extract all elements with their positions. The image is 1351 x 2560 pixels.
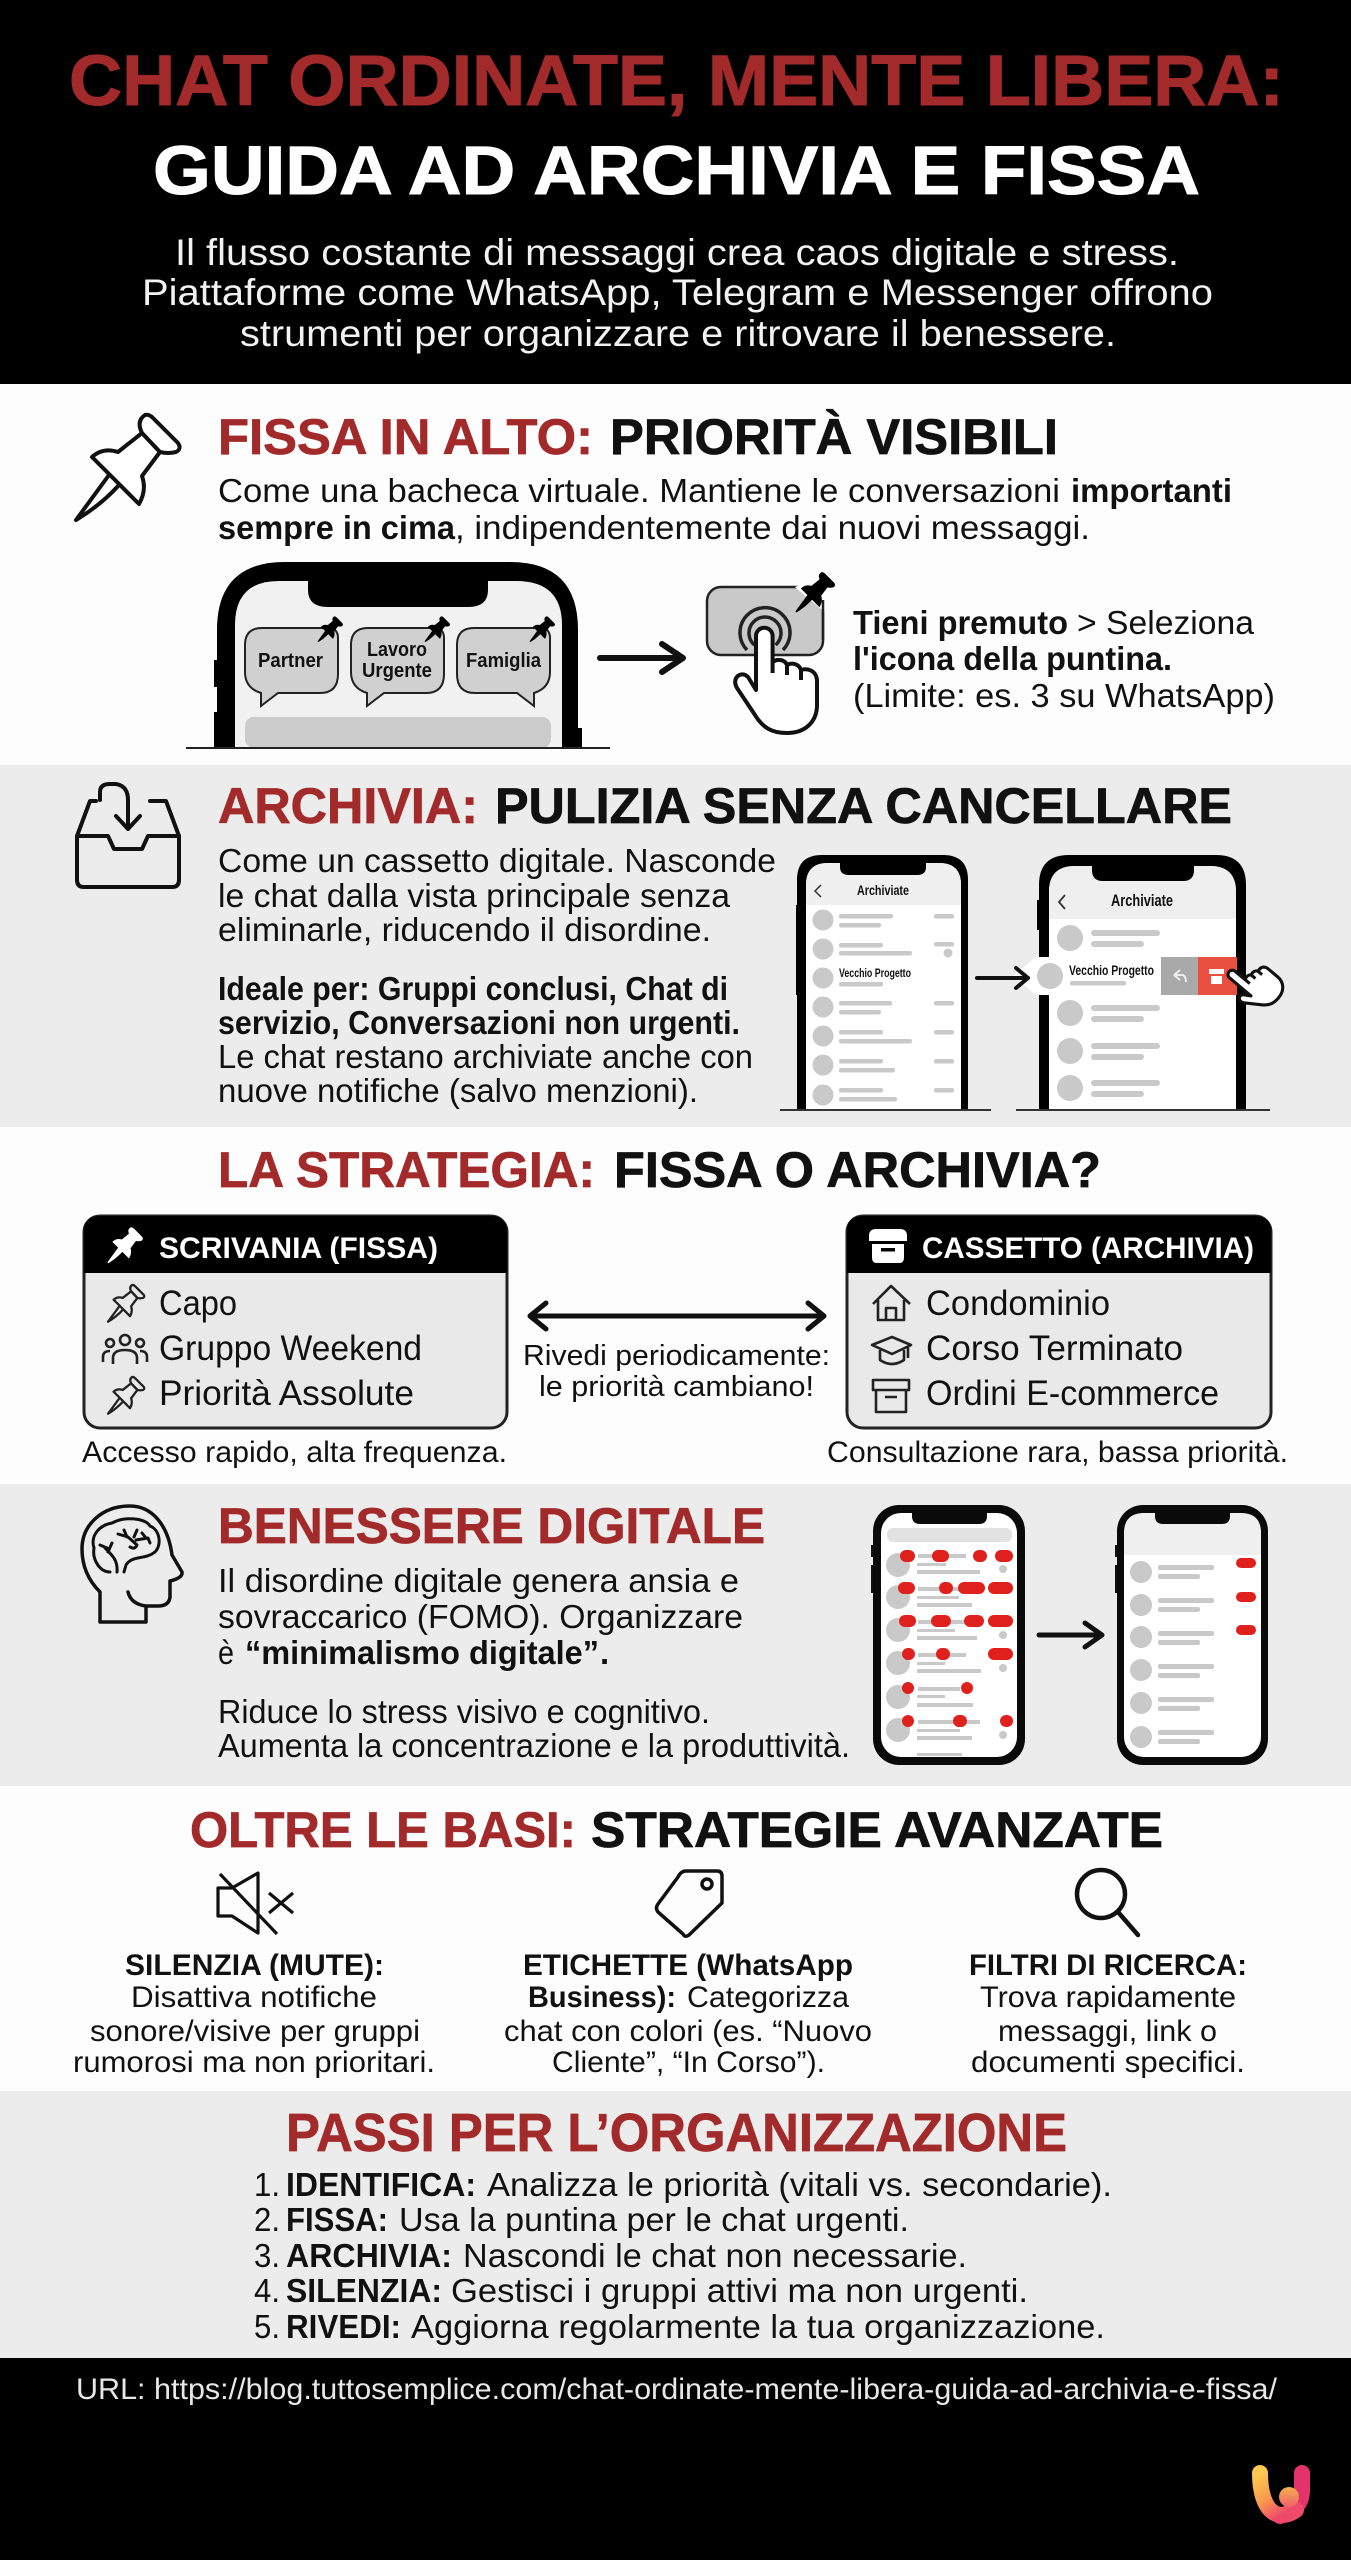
chat bubble: partner: Partner	[258, 650, 323, 672]
text: description: Il disordine digitale genera ansia e	[218, 1562, 739, 1599]
heading: benessere digitale: BENESSERE DIGITALE	[218, 1498, 765, 1554]
text: instructions: > Seleziona	[1077, 604, 1255, 641]
step 4: Gestisci i gruppi attivi ma non urgenti.	[451, 2272, 1028, 2309]
step 1	[254, 2166, 1112, 2203]
step 3: ARCHIVIA:	[286, 2237, 452, 2274]
intro text	[142, 232, 1213, 354]
step 1: 1.	[254, 2166, 280, 2203]
step 3: 3.	[254, 2237, 280, 2274]
phone: archived list	[780, 855, 991, 1111]
logo	[1260, 2473, 1302, 2516]
heading: fissa in alto: PRIORITÀ VISIBILI	[610, 409, 1058, 465]
arrow	[977, 968, 1028, 988]
text: etichette: Categorizza	[687, 1981, 849, 2014]
text: etichette: ETICHETTE (WhatsApp	[523, 1949, 853, 1982]
text: silenzia: rumorosi ma non prioritari.	[73, 2046, 435, 2079]
text: description: .	[600, 1634, 609, 1671]
text: ideal uses: servizio, Conversazioni non urgenti.	[218, 1004, 740, 1041]
panel: footer	[0, 2358, 1351, 2560]
chat bubble: famiglia: Famiglia	[466, 650, 542, 672]
swiped chat row: Vecchio Progetto	[1069, 963, 1154, 978]
text: etichette	[504, 1949, 872, 2079]
text: benefits: Riduce lo stress visivo e cognitivo.	[218, 1693, 710, 1730]
text: benefits: Aumenta la concentrazione e la produttività.	[218, 1727, 850, 1764]
text: instructions: (Limite: es. 3 su WhatsApp)	[853, 677, 1275, 714]
step 4: SILENZIA:	[286, 2272, 442, 2309]
chat bubble: partner	[245, 617, 342, 706]
arrow	[1039, 1623, 1102, 1647]
intro text: Il flusso costante di messaggi crea caos digitale e stress.	[175, 232, 1179, 273]
title line 1: CHAT ORDINATE, MENTE LIBERA:	[69, 42, 1284, 121]
text: description: sempre in cima	[218, 509, 456, 546]
step 5: Aggiorna regolarmente la tua organizzazione.	[411, 2308, 1105, 2345]
heading: la strategia	[218, 1142, 1101, 1198]
panel: passi per l'organizzazione	[0, 2091, 1351, 2358]
text: filtri di ricerca: Trova rapidamente	[980, 1981, 1236, 2014]
heading: archivia: PULIZIA SENZA CANCELLARE	[495, 778, 1232, 834]
heading: strategie avanzate	[190, 1802, 1163, 1858]
item: condominio: Condominio	[926, 1284, 1110, 1323]
text: ideal uses: Ideale per: Gruppi conclusi, Chat di	[218, 970, 728, 1007]
step 5: RIVEDI:	[286, 2308, 401, 2345]
card: scrivania: SCRIVANIA (FISSA)	[159, 1232, 438, 1265]
card: cassetto	[847, 1216, 1271, 1428]
step 4: 4.	[254, 2272, 280, 2309]
phone: swipe to archive	[1013, 855, 1289, 1111]
text: description: “minimalismo digitale”	[245, 1634, 599, 1671]
icon: hand tapping	[1219, 951, 1289, 1019]
text: etichette: Cliente”, “In Corso”).	[552, 2046, 825, 2079]
text: etichette: Business):	[528, 1981, 676, 2014]
text: description	[218, 472, 1232, 546]
step 2: Usa la puntina per le chat urgenti.	[399, 2201, 909, 2238]
step 2: FISSA:	[286, 2201, 388, 2238]
panel: archivia	[0, 765, 1351, 1127]
text: description: , indipendentemente dai nuovi messaggi.	[455, 509, 1090, 546]
text: description: importanti	[1071, 472, 1232, 509]
phone: archived list: Archiviate	[857, 882, 909, 898]
text: review note: Rivedi periodicamente:	[523, 1340, 830, 1372]
icon: push pin	[76, 415, 180, 520]
text: filtri di ricerca: messaggi, link o	[998, 2015, 1217, 2048]
caption: cassetto: Consultazione rara, bassa priorità.	[827, 1436, 1288, 1469]
step 2: 2.	[254, 2201, 280, 2238]
chat bubble: lavoro urgente: Urgente	[362, 660, 432, 682]
chat bubble: famiglia	[457, 617, 554, 706]
heading: fissa in alto: FISSA IN ALTO:	[218, 409, 593, 465]
double arrow	[530, 1303, 824, 1329]
icon: magnifier	[1077, 1870, 1138, 1935]
text: description	[218, 842, 776, 948]
step 3: Nascondi le chat non necessarie.	[463, 2237, 967, 2274]
step 5: 5.	[254, 2308, 280, 2345]
text: review note	[523, 1340, 830, 1403]
text: silenzia	[73, 1949, 435, 2079]
text: description: Come un cassetto digitale. Nasconde	[218, 842, 776, 879]
chat bubble: lavoro urgente	[351, 617, 449, 706]
heading: archivia: ARCHIVIA:	[218, 778, 478, 834]
text: silenzia: sonore/visive per gruppi	[90, 2015, 420, 2048]
text: ideal uses	[218, 970, 753, 1109]
phone: organized chats	[1115, 1505, 1268, 1765]
step 3	[254, 2237, 967, 2274]
icon: white archive box	[869, 1229, 907, 1263]
card: cassetto: CASSETTO (ARCHIVIA)	[922, 1232, 1254, 1265]
icon: tag	[656, 1871, 722, 1936]
panel: benessere digitale	[0, 1484, 1351, 1786]
intro text: strumenti per organizzare e ritrovare il benessere.	[240, 313, 1116, 354]
heading: passi: PASSI PER L’ORGANIZZAZIONE	[286, 2103, 1067, 2163]
url: URL: https://blog.tuttosemplice.com/chat-ordinate-mente-libera-guida-ad-archivia-e-fissa/	[76, 2373, 1278, 2406]
panel: header	[0, 0, 1351, 384]
text: description: è	[218, 1634, 234, 1671]
text: instructions: l'icona della puntina.	[853, 640, 1172, 677]
phone: archived list: Vecchio Progetto	[839, 966, 911, 980]
item: priorita assolute: Priorità Assolute	[159, 1374, 414, 1413]
icon: long press with pin	[707, 570, 840, 733]
text: filtri di ricerca	[969, 1949, 1247, 2079]
icon: inbox tray	[77, 784, 179, 887]
icon: muted speaker	[218, 1873, 293, 1934]
phone: cluttered notifications	[871, 1505, 1025, 1765]
text: filtri di ricerca: FILTRI DI RICERCA:	[969, 1949, 1247, 1982]
text: description: Come una bacheca virtuale. Mantiene le conversazioni	[218, 472, 1060, 509]
heading: la strategia: FISSA O ARCHIVIA?	[614, 1142, 1101, 1198]
item: capo	[108, 1284, 237, 1323]
text: description: le chat dalla vista principale senza	[218, 877, 731, 914]
card: scrivania	[84, 1216, 507, 1428]
phone: swipe to archive: Archiviate	[1111, 892, 1173, 910]
text: description	[218, 1562, 743, 1671]
swiped chat row	[1013, 957, 1237, 995]
heading: strategie avanzate: STRATEGIE AVANZATE	[591, 1802, 1163, 1858]
text: ideal uses: nuove notifiche (salvo menzioni).	[218, 1072, 698, 1109]
text: review note: le priorità cambiano!	[539, 1371, 814, 1403]
title line 2: GUIDA AD ARCHIVIA E FISSA	[153, 132, 1200, 209]
panel: oltre le basi	[0, 1786, 1351, 2091]
panel: la strategia	[0, 1127, 1351, 1484]
text: etichette: chat con colori (es. “Nuovo	[504, 2015, 872, 2048]
heading: la strategia: LA STRATEGIA:	[218, 1142, 595, 1198]
heading: strategie avanzate: OLTRE LE BASI:	[190, 1802, 576, 1858]
panel: fissa in alto	[0, 384, 1351, 765]
text: filtri di ricerca: documenti specifici.	[971, 2046, 1245, 2079]
text: silenzia: Disattiva notifiche	[131, 1981, 377, 2014]
chat bubble: lavoro urgente: Lavoro	[367, 639, 427, 661]
item: corso terminato: Corso Terminato	[926, 1329, 1183, 1368]
item: ordini e-commerce: Ordini E-commerce	[926, 1374, 1219, 1413]
text: description: sovraccarico (FOMO). Organizzare	[218, 1598, 743, 1635]
step 1: IDENTIFICA:	[286, 2166, 476, 2203]
intro text: Piattaforme come WhatsApp, Telegram e Messenger offrono	[142, 272, 1213, 313]
text: benefits	[218, 1693, 850, 1764]
text: silenzia: SILENZIA (MUTE):	[125, 1949, 384, 1982]
item: gruppo weekend: Gruppo Weekend	[159, 1329, 422, 1368]
phone with pinned chats	[186, 562, 610, 749]
icon: white pin	[108, 1228, 142, 1263]
caption: scrivania: Accesso rapido, alta frequenza.	[82, 1436, 507, 1469]
text: instructions: Tieni premuto	[853, 604, 1068, 641]
icon: head with brain	[82, 1506, 182, 1622]
step 1: Analizza le priorità (vitali vs. secondarie).	[487, 2166, 1112, 2203]
text: description: eliminarle, riducendo il disordine.	[218, 911, 711, 948]
arrow	[600, 644, 683, 672]
heading: fissa in alto	[218, 409, 1058, 465]
text: ideal uses: Le chat restano archiviate anche con	[218, 1038, 753, 1075]
text: instructions	[853, 604, 1275, 714]
item: capo: Capo	[159, 1284, 237, 1323]
